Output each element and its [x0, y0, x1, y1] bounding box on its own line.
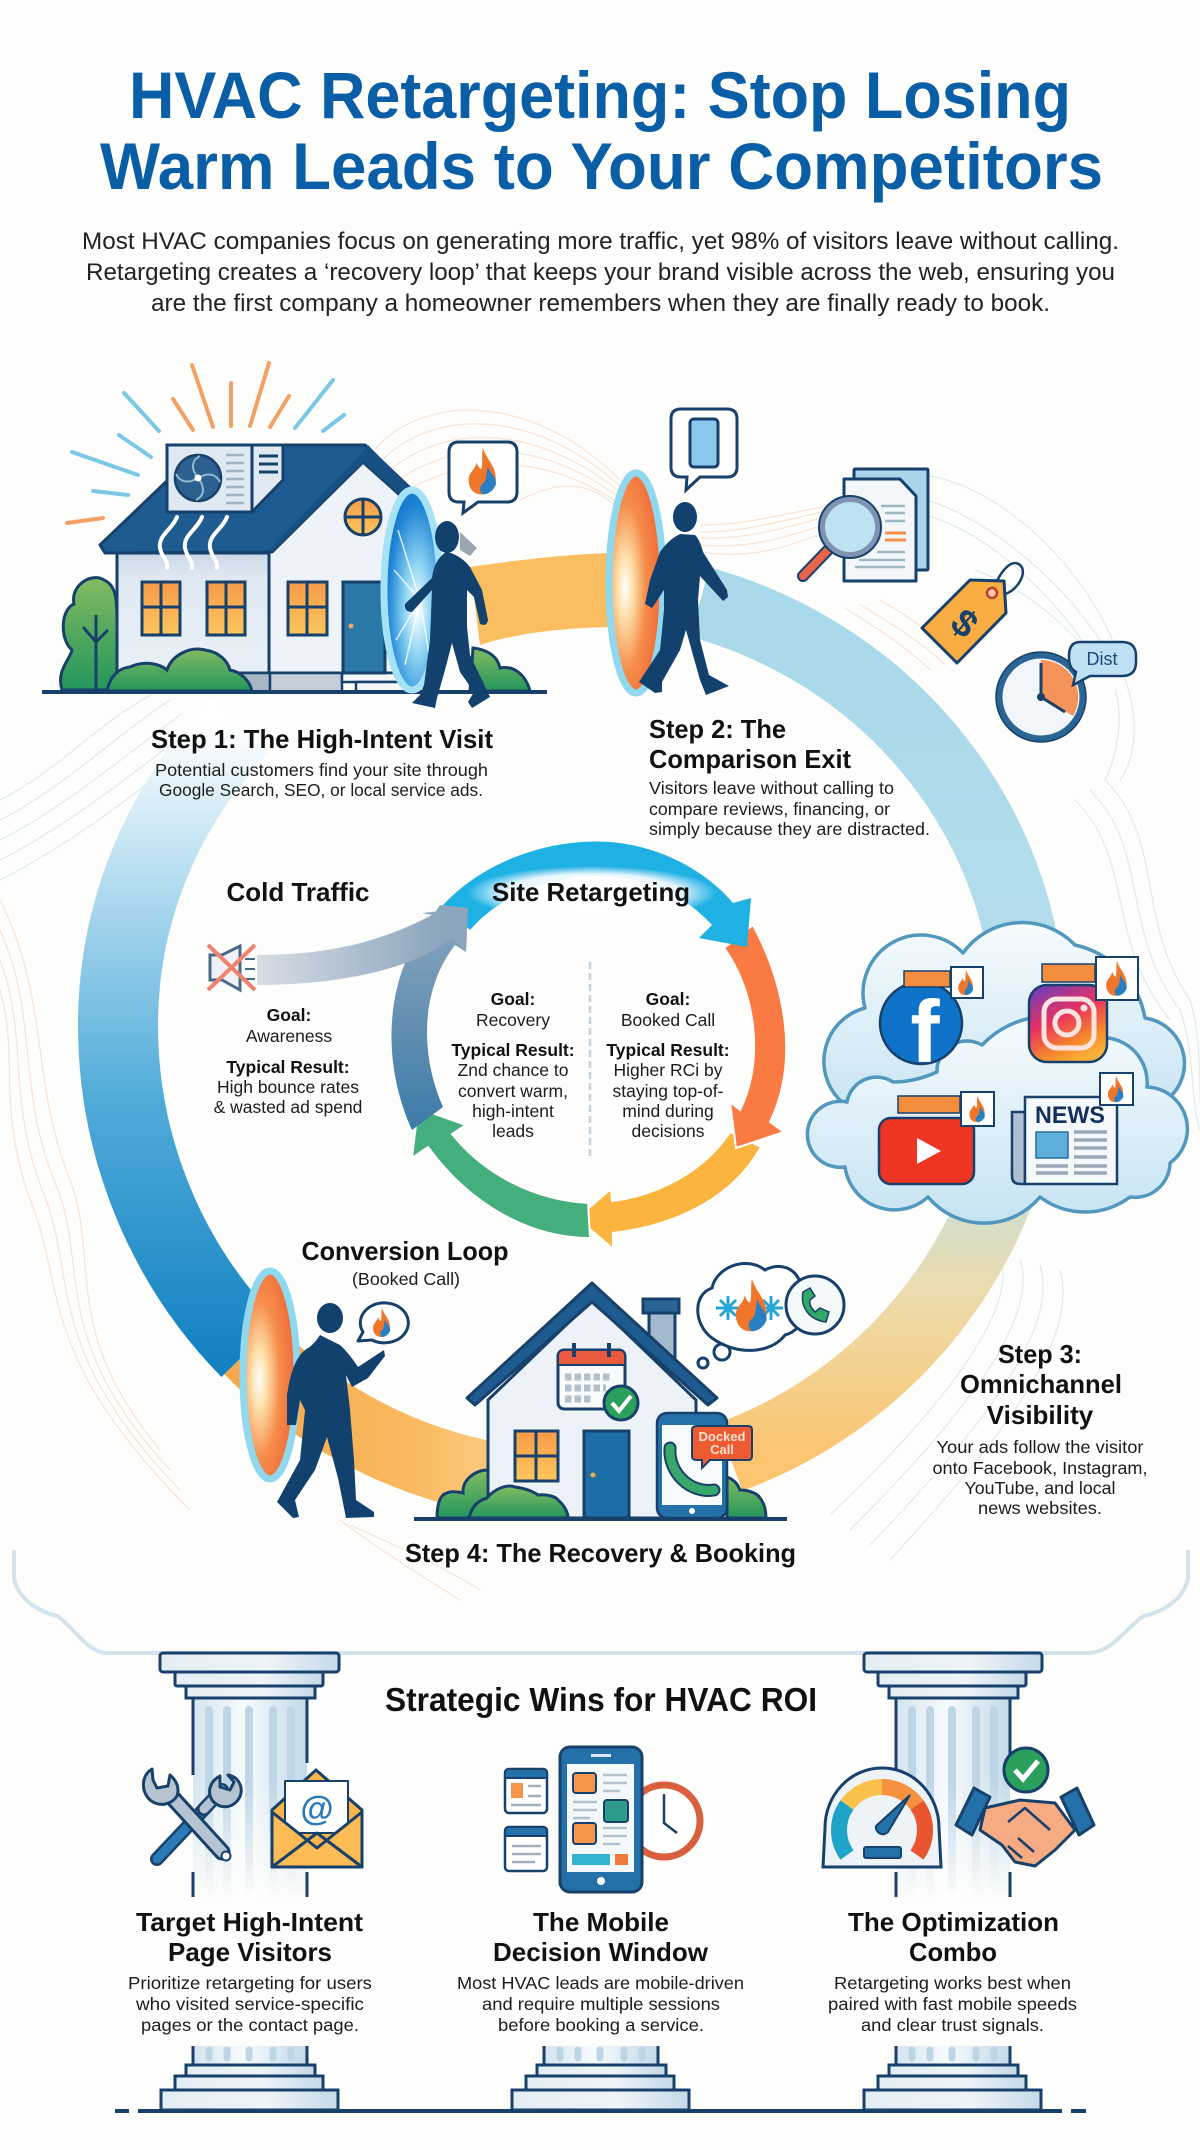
icon: windows	[142, 499, 381, 635]
heading: step 4: Step 4: The Recovery & Booking	[405, 1538, 796, 1568]
text: cold traffic: Awareness	[246, 1026, 332, 1046]
text: recovery column: Typical Result:	[451, 1040, 575, 1060]
icon: facebook: f	[910, 982, 940, 1081]
heading: conversion loop: (Booked Call)	[352, 1269, 460, 1289]
text: recovery column: Goal:	[491, 989, 535, 1009]
text: booked call column: Booked Call	[621, 1010, 715, 1030]
icon: bushes	[107, 648, 530, 691]
text: optimization combo: Combo	[909, 1937, 997, 1967]
person: visitor step 1	[405, 521, 490, 708]
step 4 house illustration	[414, 1283, 787, 1521]
house walls	[117, 462, 402, 673]
text: step 3: Visibility	[987, 1400, 1094, 1430]
text: step 3: YouTube, and local	[964, 1478, 1116, 1498]
text: step 3: Step 3:	[998, 1339, 1082, 1369]
text: cold traffic: Cold Traffic	[226, 877, 370, 907]
icon: youtube	[879, 1092, 994, 1184]
text: recovery column: leads	[492, 1121, 534, 1141]
text: recovery column	[451, 989, 575, 1141]
intro text	[82, 228, 1119, 317]
text: recovery column: Znd chance to	[458, 1060, 568, 1080]
text: target high-intent: who visited service-specific	[135, 1994, 364, 2014]
icon: facebook	[880, 967, 983, 1081]
icon: AC unit	[167, 445, 283, 512]
text: recovery column: convert warm,	[458, 1081, 568, 1101]
text: booked call column: Higher RCi by	[614, 1060, 723, 1080]
heading: conversion loop	[302, 1236, 508, 1289]
roof	[100, 445, 410, 553]
text: step 2	[649, 714, 930, 839]
text: step 3: Your ads follow the visitor	[936, 1437, 1144, 1457]
icon: documents and magnifier	[803, 469, 928, 581]
arrow: blue	[443, 841, 751, 947]
text: step 1: Potential customers find your site through	[155, 760, 488, 780]
icon: sun rays	[67, 363, 344, 523]
text: cold traffic: Typical Result:	[226, 1057, 350, 1077]
text: step 1: Step 1: The High-Intent Visit	[151, 724, 493, 754]
icon: flame speech bubble	[449, 442, 517, 513]
icon: distraction clock	[996, 642, 1136, 742]
arrow: orange	[724, 925, 786, 1148]
text: step 2: Visitors leave without calling to	[649, 778, 894, 798]
text: cold traffic: High bounce rates	[217, 1077, 359, 1097]
heading: conversion loop: Conversion Loop	[302, 1236, 508, 1266]
big recovery loop ring	[118, 602, 1030, 1484]
text: mobile decision window: Most HVAC leads are mobile-driven	[457, 1973, 744, 1993]
text: step 3: onto Facebook, Instagram,	[932, 1458, 1148, 1478]
center loop arrows	[257, 841, 786, 1249]
icon: check badge	[604, 1386, 638, 1420]
icon: email envelope	[272, 1770, 362, 1867]
text: mobile decision window: The Mobile	[533, 1907, 669, 1937]
text: recovery column: Recovery	[476, 1010, 550, 1030]
icon: smartphone booking	[657, 1413, 752, 1518]
door	[343, 582, 385, 673]
text: target high-intent: Page Visitors	[168, 1937, 332, 1967]
pillar: left	[160, 1653, 339, 2110]
step 1 house illustration	[42, 363, 547, 694]
text: cold traffic: & wasted ad spend	[214, 1097, 362, 1117]
arrow: yellow	[577, 1132, 761, 1249]
cloud: omnichannel	[807, 923, 1187, 1223]
icon: crossed-out megaphone	[208, 945, 255, 990]
heading: strategic wins: Strategic Wins for HVAC ROI	[385, 1681, 817, 1718]
pillar: middle base	[512, 2046, 689, 2110]
intro text: are the first company a homeowner remembers when they are finally ready to book.	[151, 290, 1050, 317]
icon: smartphone booking: Call	[710, 1442, 734, 1457]
icon: phone speech bubble	[671, 409, 737, 490]
text: step 3: Omnichannel	[960, 1369, 1122, 1399]
text: optimization combo: Retargeting works best when	[834, 1973, 1071, 1993]
text: optimization combo	[828, 1907, 1077, 2035]
icon: calendar	[558, 1343, 625, 1409]
person: visitor step 2	[639, 502, 729, 695]
arrow: green	[412, 1108, 590, 1238]
title	[100, 58, 1103, 203]
icon: news: NEWS	[1035, 1102, 1105, 1129]
text: step 3	[932, 1339, 1148, 1518]
icon: instagram	[1029, 957, 1138, 1062]
arrow: steel	[391, 905, 468, 1130]
portal: return	[243, 1271, 297, 1479]
icon: wrenches	[143, 1769, 241, 1860]
text: optimization combo: and clear trust signals.	[861, 2015, 1044, 2035]
icon: bushes	[437, 1470, 766, 1518]
icon: speedometer	[823, 1768, 941, 1867]
text: step 2: simply because they are distracted.	[649, 819, 930, 839]
text: booked call column: Typical Result:	[606, 1040, 730, 1060]
intro text: Most HVAC companies focus on generating more traffic, yet 98% of visitors leave without calling.	[82, 228, 1119, 255]
text: optimization combo: paired with fast mobile speeds	[828, 1994, 1077, 2014]
icon: smartphone booking: Docked	[699, 1429, 746, 1444]
text: target high-intent: Target High-Intent	[136, 1907, 363, 1937]
pillar: right	[864, 1653, 1042, 2110]
text: step 1: Google Search, SEO, or local service ads.	[159, 780, 483, 800]
text: cold traffic: Goal:	[267, 1005, 311, 1025]
icon: email envelope: @	[300, 1790, 334, 1828]
heading: site retargeting: Site Retargeting	[492, 877, 690, 907]
arrow: cold traffic	[257, 908, 468, 985]
text: mobile decision window: Decision Window	[493, 1937, 709, 1967]
portal: site exit	[384, 490, 440, 690]
icon: tree	[61, 578, 117, 690]
person: returning visitor	[277, 1303, 385, 1518]
text: target high-intent: pages or the contact page.	[141, 2015, 359, 2035]
icon: handshake	[956, 1788, 1094, 1866]
text: target high-intent: Prioritize retargeting for users	[128, 1973, 372, 1993]
icon: price tag	[922, 563, 1023, 663]
text: mobile decision window: and require multiple sessions	[482, 1994, 720, 2014]
text: step 3: news websites.	[978, 1498, 1102, 1518]
text: target high-intent	[128, 1907, 372, 2035]
text: booked call column: staying top-of-	[613, 1081, 724, 1101]
orange exit band	[470, 553, 625, 645]
text: optimization combo: The Optimization	[848, 1907, 1059, 1937]
icon: flame bubble	[358, 1303, 408, 1343]
text: mobile decision window	[457, 1907, 744, 2035]
text: mobile decision window: before booking a service.	[498, 2015, 704, 2035]
text: cold traffic	[214, 877, 370, 1117]
text: booked call column: mind during	[622, 1101, 714, 1121]
text: step 2: Comparison Exit	[649, 744, 851, 774]
foundation	[120, 673, 406, 692]
text: step 1	[151, 724, 493, 800]
text: step 2: compare reviews, financing, or	[649, 799, 890, 819]
icon: thought cloud	[698, 1263, 844, 1368]
text: booked call column: Goal:	[646, 989, 690, 1009]
steam	[160, 517, 227, 568]
text: step 2: Step 2: The	[649, 714, 786, 744]
icon: check badge	[1004, 1748, 1048, 1792]
icon: distraction clock: Dist	[1086, 649, 1118, 669]
title: HVAC Retargeting: Stop Losing	[129, 58, 1071, 132]
portal: orange exit	[609, 473, 663, 693]
intro text: Retargeting creates a ‘recovery loop’ that keeps your brand visible across the web, ensuring you	[86, 259, 1115, 286]
text: booked call column: decisions	[632, 1121, 705, 1141]
icon: mobile with cards and clock	[505, 1747, 700, 1892]
icon: news	[1012, 1073, 1133, 1184]
text: booked call column	[606, 989, 730, 1141]
title: Warm Leads to Your Competitors	[100, 129, 1103, 203]
icon: price tag: $	[942, 601, 986, 647]
text: recovery column: high-intent	[472, 1101, 554, 1121]
